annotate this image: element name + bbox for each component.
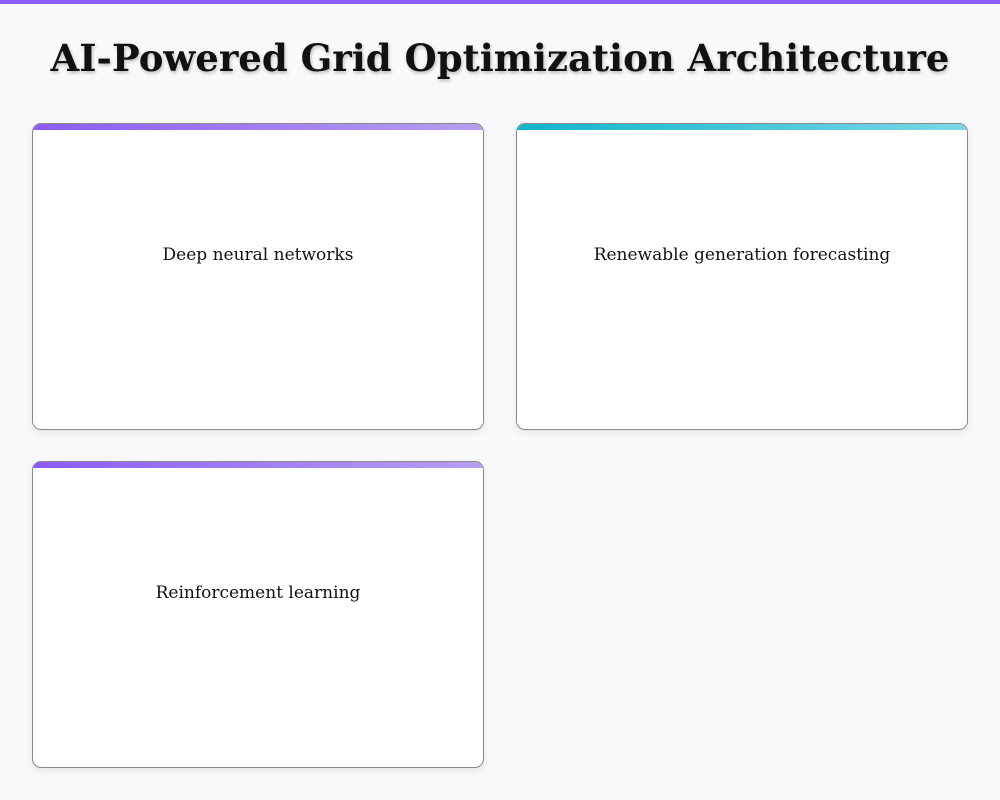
title: AI-Powered Grid Optimization Architecture: [51, 36, 949, 80]
panel: renewable forecasting: [516, 123, 968, 430]
panel: deep neural networks: [32, 123, 484, 430]
text: renewable forecasting: Renewable generation forecasting: [594, 245, 890, 265]
panel: reinforcement learning: [32, 461, 484, 768]
text: reinforcement learning: Reinforcement learning: [156, 583, 360, 603]
text: deep neural networks: Deep neural networks: [163, 245, 353, 265]
